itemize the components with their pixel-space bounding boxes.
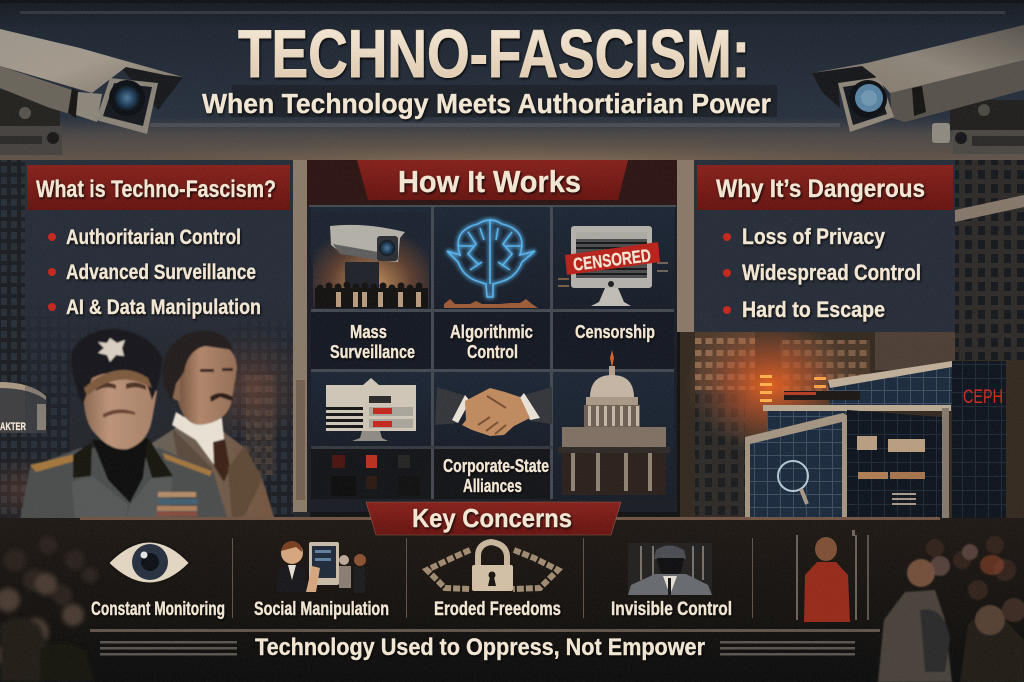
label: censorship: Censorship — [575, 322, 655, 342]
panel gutters — [293, 160, 695, 512]
left panel heading: What is Techno-Fascism? — [36, 176, 276, 203]
label: eroded freedoms: Eroded Freedoms — [434, 599, 561, 620]
crowd: left side — [0, 536, 98, 682]
panel: what is techno-fascism — [0, 160, 293, 518]
right bullet list: Hard to Escape — [742, 297, 885, 322]
portrait: man in suit — [147, 331, 275, 520]
icon: padlock and chains — [427, 542, 558, 591]
label: mass surveillance — [330, 322, 415, 362]
tagline rule — [90, 629, 880, 656]
right bullet list: Widespread Control — [742, 260, 921, 285]
icon: mass surveillance camera over crowd — [313, 212, 429, 308]
center heading ribbon: How It Works — [398, 164, 581, 199]
icon: watching eye — [108, 542, 190, 584]
label: invisible control: Invisible Control — [611, 599, 732, 620]
label: algorithmic control — [450, 322, 533, 362]
portrait: general in uniform — [20, 329, 228, 520]
label: mass surveillance: Surveillance — [330, 342, 415, 362]
icon: censored monitor: CENSORED — [572, 245, 652, 275]
right panel heading — [697, 165, 953, 210]
right bullet list — [723, 224, 921, 322]
left panel heading — [27, 165, 290, 210]
icon: right security camera — [812, 25, 1024, 154]
label: constant monitoring: Constant Monitoring — [91, 599, 225, 620]
redacted blocks — [331, 455, 420, 496]
label: algorithmic control: Algorithmic — [450, 322, 533, 342]
main title: TECHNO-FASCISM: — [238, 16, 750, 92]
figure: red jacket person in doorway — [796, 530, 869, 622]
sign: red building lettering: CEPH — [963, 387, 1003, 408]
left bullet list — [48, 226, 261, 319]
key concerns ribbon — [366, 502, 621, 535]
grid cells — [309, 205, 676, 499]
label: social manipulation: Social Manipulation — [254, 599, 389, 620]
left bullet list: AI & Data Manipulation — [66, 296, 261, 319]
icon: faceless man behind bars — [628, 543, 712, 595]
label: mass surveillance: Mass — [350, 322, 387, 342]
icon: handshake — [435, 387, 552, 436]
label: corporate-state alliances — [443, 456, 549, 496]
crowd silhouettes under brain — [444, 299, 538, 308]
icon: social manipulation — [276, 541, 366, 593]
key concerns ribbon: Key Concerns — [412, 503, 572, 533]
panel: key concerns band — [0, 502, 1024, 682]
tagline: Technology Used to Oppress, Not Empower — [255, 634, 705, 661]
right panel heading: Why It’s Dangerous — [716, 175, 925, 203]
sign: storefront lettering: AKTER — [0, 421, 26, 433]
icon: glowing circuit brain — [447, 220, 535, 297]
background: header band — [0, 0, 1024, 172]
label: corporate-state alliances: Corporate-State — [443, 456, 549, 476]
label: corporate-state alliances: Alliances — [463, 476, 522, 496]
left bullet list: Authoritarian Control — [66, 226, 241, 249]
label: algorithmic control: Control — [467, 342, 518, 362]
panel: how it works — [307, 160, 677, 512]
background: city left — [0, 160, 310, 525]
building: glass headquarters — [745, 361, 1006, 520]
magnifier logo — [778, 461, 808, 504]
crowd: right side — [878, 536, 1024, 682]
icon: propaganda monitor — [326, 378, 416, 441]
left bullet list: Advanced Surveillance — [66, 261, 256, 284]
background: city right — [680, 160, 1024, 520]
icon: censored monitor — [558, 226, 668, 306]
panel: why it's dangerous — [694, 160, 955, 332]
right bullet list: Loss of Privacy — [742, 224, 886, 249]
icon: left security camera — [0, 29, 183, 155]
icon: capitol dome — [558, 350, 670, 495]
subtitle: When Technology Meets Authortiarian Power — [202, 88, 771, 119]
center heading ribbon — [357, 160, 628, 200]
dividers — [232, 538, 753, 618]
